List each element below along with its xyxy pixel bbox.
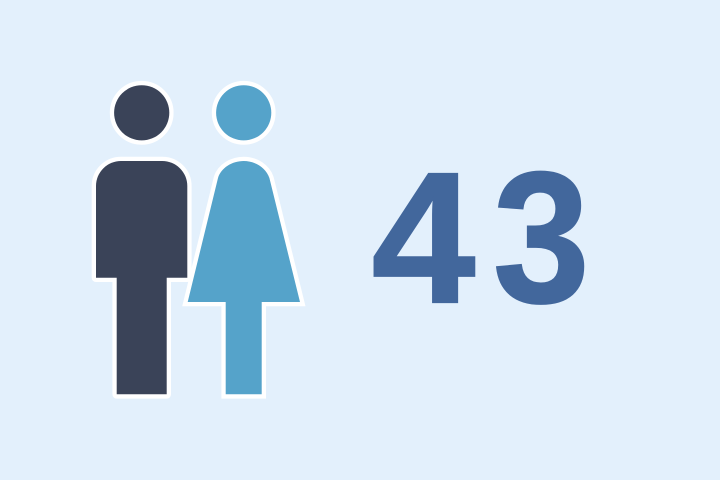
- number 43: 3: [493, 133, 590, 342]
- icon: female figure: [188, 85, 300, 394]
- icon: male figure: [96, 85, 187, 394]
- male body: [96, 161, 187, 394]
- female head: [216, 85, 271, 140]
- female body: [188, 161, 300, 394]
- number 43: 4: [372, 133, 476, 342]
- male head: [114, 85, 169, 140]
